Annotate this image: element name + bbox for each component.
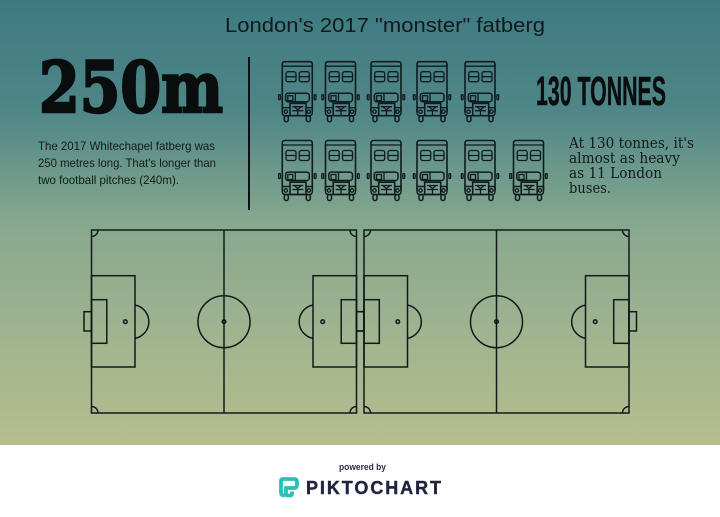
vertical divider — [248, 57, 250, 210]
weight description: At 130 tonnes, it's — [568, 134, 694, 152]
footer: powered by Piktochart — [281, 462, 441, 498]
weight description: almost as heavy — [569, 149, 680, 167]
football pitches diagram — [84, 230, 636, 413]
length description: two football pitches (240m). — [38, 173, 179, 187]
length description: 250 metres long. That's longer than — [38, 156, 216, 170]
title: London's 2017 "monster" fatberg — [225, 15, 545, 37]
length description — [38, 139, 216, 187]
Piktochart wordmark: PIKTOCHART — [306, 478, 441, 498]
big number: 250m: 250m — [39, 46, 223, 129]
weight description: buses. — [569, 179, 611, 197]
weight description: as 11 London — [569, 164, 662, 182]
length description: The 2017 Whitechapel fatberg was — [38, 139, 215, 153]
powered by label: powered by — [339, 462, 387, 473]
weight description — [568, 134, 694, 197]
panel: length statistic — [38, 46, 223, 187]
bus pictogram: 11 London buses — [279, 62, 547, 201]
icon: Piktochart logo — [281, 479, 297, 496]
